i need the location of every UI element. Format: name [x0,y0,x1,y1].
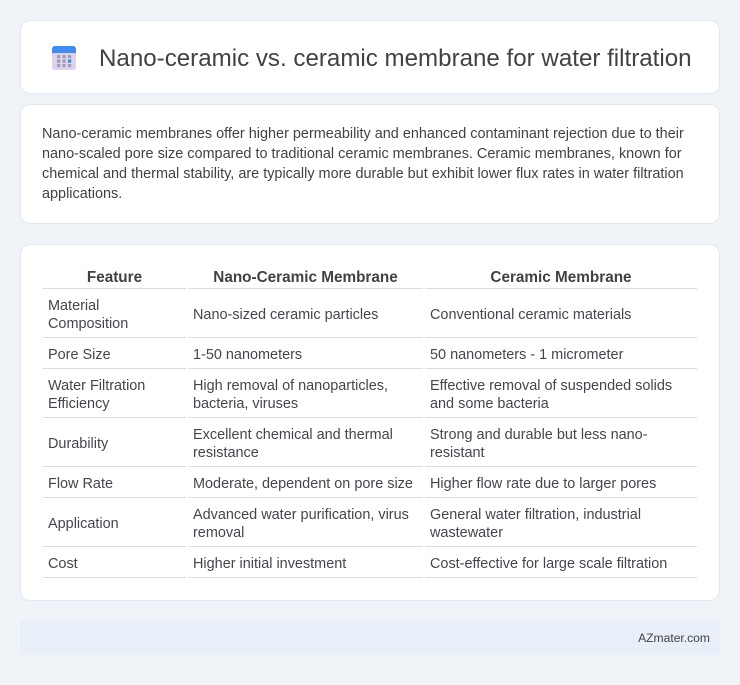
column heading: Nano-Ceramic Membrane: Nano-Ceramic Membrane [213,269,398,286]
header panel [20,20,720,94]
row: Application: Application [48,516,119,532]
row: Durability: Durability [48,436,108,452]
comparison table: Higher initial investment [193,556,346,572]
comparison table: High removal of nanoparticles, [193,378,388,394]
comparison table: removal [193,525,244,541]
comparison table: Moderate, dependent on pore size [193,476,413,492]
row: Material Composition: Composition [48,316,128,332]
comparison table: Strong and durable but less nano- [430,427,648,443]
comparison table: Advanced water purification, virus [193,507,409,523]
comparison table: Excellent chemical and thermal [193,427,393,443]
summary text: nano-scaled pore size compared to traditional ceramic membranes. Ceramic membranes, known for [42,146,682,162]
comparison table: resistant [430,445,485,461]
row: Flow Rate: Flow Rate [48,476,113,492]
row: Material Composition [48,298,128,332]
comparison table: 50 nanometers - 1 micrometer [430,347,623,363]
title: Nano-ceramic vs. ceramic membrane for water filtration [99,45,692,72]
comparison table: Effective removal of suspended solids [430,378,672,394]
comparison table: Conventional ceramic materials [430,307,631,323]
column heading: Ceramic Membrane: Ceramic Membrane [490,269,632,286]
summary text [42,126,684,202]
comparison table: bacteria, viruses [193,396,298,412]
comparison table: and some bacteria [430,396,549,412]
comparison table: Higher flow rate due to larger pores [430,476,656,492]
row: Pore Size: Pore Size [48,347,111,363]
row: Water Filtration Efficiency: Efficiency [48,396,110,412]
comparison table: Nano-sized ceramic particles [193,307,378,323]
row: Material Composition: Material [48,298,99,314]
row: Cost: Cost [48,556,78,572]
footer bar [20,621,720,655]
comparison table: wastewater [430,525,503,541]
comparison table: General water filtration, industrial [430,507,641,523]
summary text: applications. [42,186,122,202]
row: Water Filtration Efficiency: Water Filtration [48,378,145,394]
row: Water Filtration Efficiency [48,378,145,412]
footer credit: AZmater.com [638,631,710,645]
comparison table: resistance [193,445,259,461]
comparison table panel [20,244,720,601]
summary text: Nano-ceramic membranes offer higher permeability and enhanced contaminant rejection due to their [42,126,684,142]
comparison table: 1-50 nanometers [193,347,302,363]
comparison table: Cost-effective for large scale filtration [430,556,667,572]
summary text: chemical and thermal stability, are typically more durable but exhibit lower flux rates in water filtration [42,166,684,182]
summary panel [20,104,720,224]
icon: calendar grid [52,46,76,70]
column heading: Feature: Feature [87,269,142,286]
